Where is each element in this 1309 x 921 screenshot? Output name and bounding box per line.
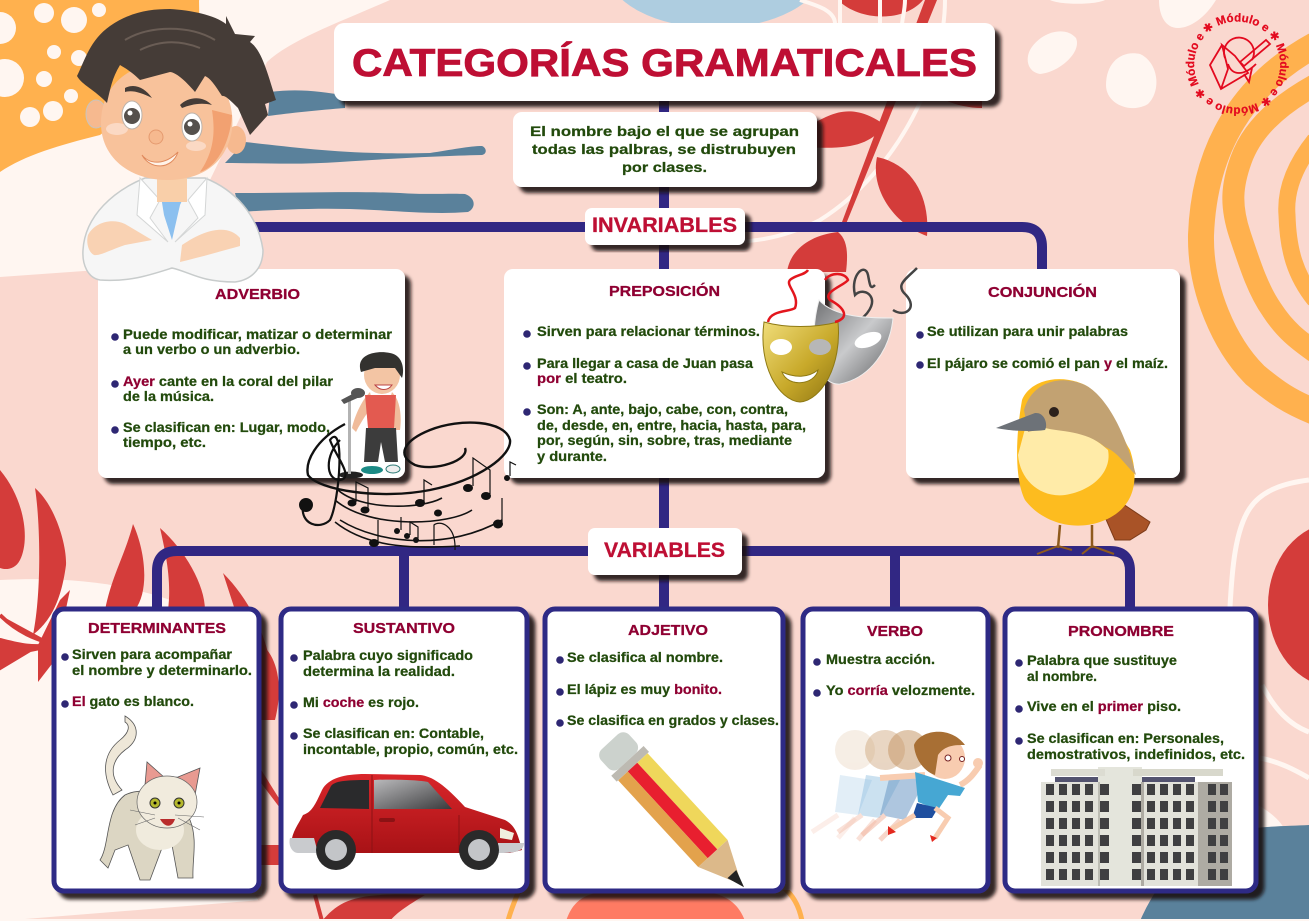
panel: pronombre: Palabra que sustituye	[1027, 653, 1177, 668]
intro text box	[513, 112, 817, 187]
heading: invariables: INVARIABLES	[592, 214, 737, 237]
intro text box: por clases.	[622, 160, 707, 175]
illustration: building	[1041, 767, 1232, 886]
panel: verbo	[803, 609, 988, 891]
panel: sustantivo: Palabra cuyo significado	[303, 648, 473, 663]
panel: preposición: por, según, sin, sobre, tras, mediante	[537, 433, 792, 448]
panel: adjetivo	[545, 609, 783, 891]
illustration: pencil	[594, 727, 760, 902]
panel: conjunción	[906, 269, 1180, 478]
panel: preposición: Son: A, ante, bajo, cabe, con, contra,	[537, 402, 788, 417]
panel: verbo: Yo corría velozmente.	[826, 683, 975, 698]
panel: sustantivo: Mi coche es rojo.	[303, 695, 419, 710]
heading: variables	[588, 528, 742, 575]
illustration: music notes	[299, 423, 516, 550]
title	[334, 23, 995, 101]
logo: módulo e stamp: Módulo e ✱ Módulo e ✱ Módulo e ✱ Módulo e ✱	[1186, 13, 1289, 116]
panel: preposición	[504, 269, 825, 478]
panel: adverbio: Se clasifican en: Lugar, modo,	[123, 420, 330, 435]
panel: conjunción: El pájaro se comió el pan y el maíz.	[927, 356, 1168, 371]
panel: adjetivo: Se clasifica en grados y clases.	[567, 713, 779, 728]
panel: preposición: PREPOSICIÓN	[609, 282, 720, 300]
panel: adjetivo: El lápiz es muy bonito.	[567, 682, 722, 697]
heading: invariables	[585, 208, 745, 245]
intro text box: todas las palbras, se distrubuyen	[532, 142, 796, 157]
panel: preposición: Sirven para relacionar términos.	[537, 324, 760, 339]
illustration: cat	[100, 716, 204, 880]
illustration: running boy	[812, 730, 983, 842]
panel: sustantivo: SUSTANTIVO	[353, 620, 455, 637]
panel: preposición: Para llegar a casa de Juan pasa	[537, 356, 753, 371]
panel: sustantivo: Se clasifican en: Contable,	[303, 726, 484, 741]
heading: variables: VARIABLES	[604, 539, 725, 562]
panel: pronombre: demostrativos, indefinidos, etc.	[1027, 747, 1245, 762]
panel: conjunción: CONJUNCIÓN	[988, 283, 1097, 301]
panel: determinantes: el nombre y determinarlo.	[72, 663, 252, 678]
panel: sustantivo	[281, 609, 527, 891]
panel: preposición: por el teatro.	[537, 371, 627, 386]
panel: pronombre: PRONOMBRE	[1068, 623, 1174, 640]
panel: adverbio: Ayer cante en la coral del pilar	[123, 374, 334, 389]
panel: pronombre: Vive en el primer piso.	[1027, 699, 1181, 714]
illustration: bird	[996, 379, 1150, 554]
panel: adverbio: ADVERBIO	[215, 286, 300, 303]
panel: pronombre	[1005, 609, 1256, 891]
panel: preposición: de, desde, en, entre, hacia, hasta, para,	[537, 418, 806, 433]
illustration: red car	[289, 774, 524, 870]
panel: determinantes: El gato es blanco.	[72, 694, 194, 709]
panel: determinantes	[54, 609, 259, 891]
illustration: singer boy with microphone	[339, 352, 403, 478]
panel: adjetivo: Se clasifica al nombre.	[567, 650, 723, 665]
illustration: theatre masks	[763, 268, 917, 402]
panel: adverbio: de la música.	[123, 389, 214, 404]
illustration: boy scientist	[77, 9, 276, 282]
panel: adjetivo: ADJETIVO	[628, 622, 708, 639]
panel: adverbio: tiempo, etc.	[123, 435, 206, 450]
panel: adverbio	[98, 269, 405, 478]
panel: pronombre: al nombre.	[1027, 669, 1097, 684]
panel: conjunción: Se utilizan para unir palabras	[927, 324, 1128, 339]
panel: determinantes: DETERMINANTES	[88, 620, 226, 637]
panel: sustantivo: incontable, propio, común, etc.	[303, 742, 518, 757]
panel: adverbio: Puede modificar, matizar o determinar	[123, 327, 393, 342]
intro text box: El nombre bajo el que se agrupan	[530, 124, 799, 139]
panel: determinantes: Sirven para acompañar	[72, 647, 233, 662]
panel: verbo: VERBO	[867, 623, 923, 640]
panel: verbo: Muestra acción.	[826, 652, 935, 667]
panel: preposición: y durante.	[537, 449, 607, 464]
connectors: tree lines	[157, 95, 1130, 612]
panel: sustantivo: determina la realidad.	[303, 664, 455, 679]
panel: adverbio: a un verbo o un adverbio.	[123, 342, 300, 357]
panel: pronombre: Se clasifican en: Personales,	[1027, 731, 1224, 746]
title: CATEGORÍAS GRAMATICALES	[352, 41, 977, 85]
